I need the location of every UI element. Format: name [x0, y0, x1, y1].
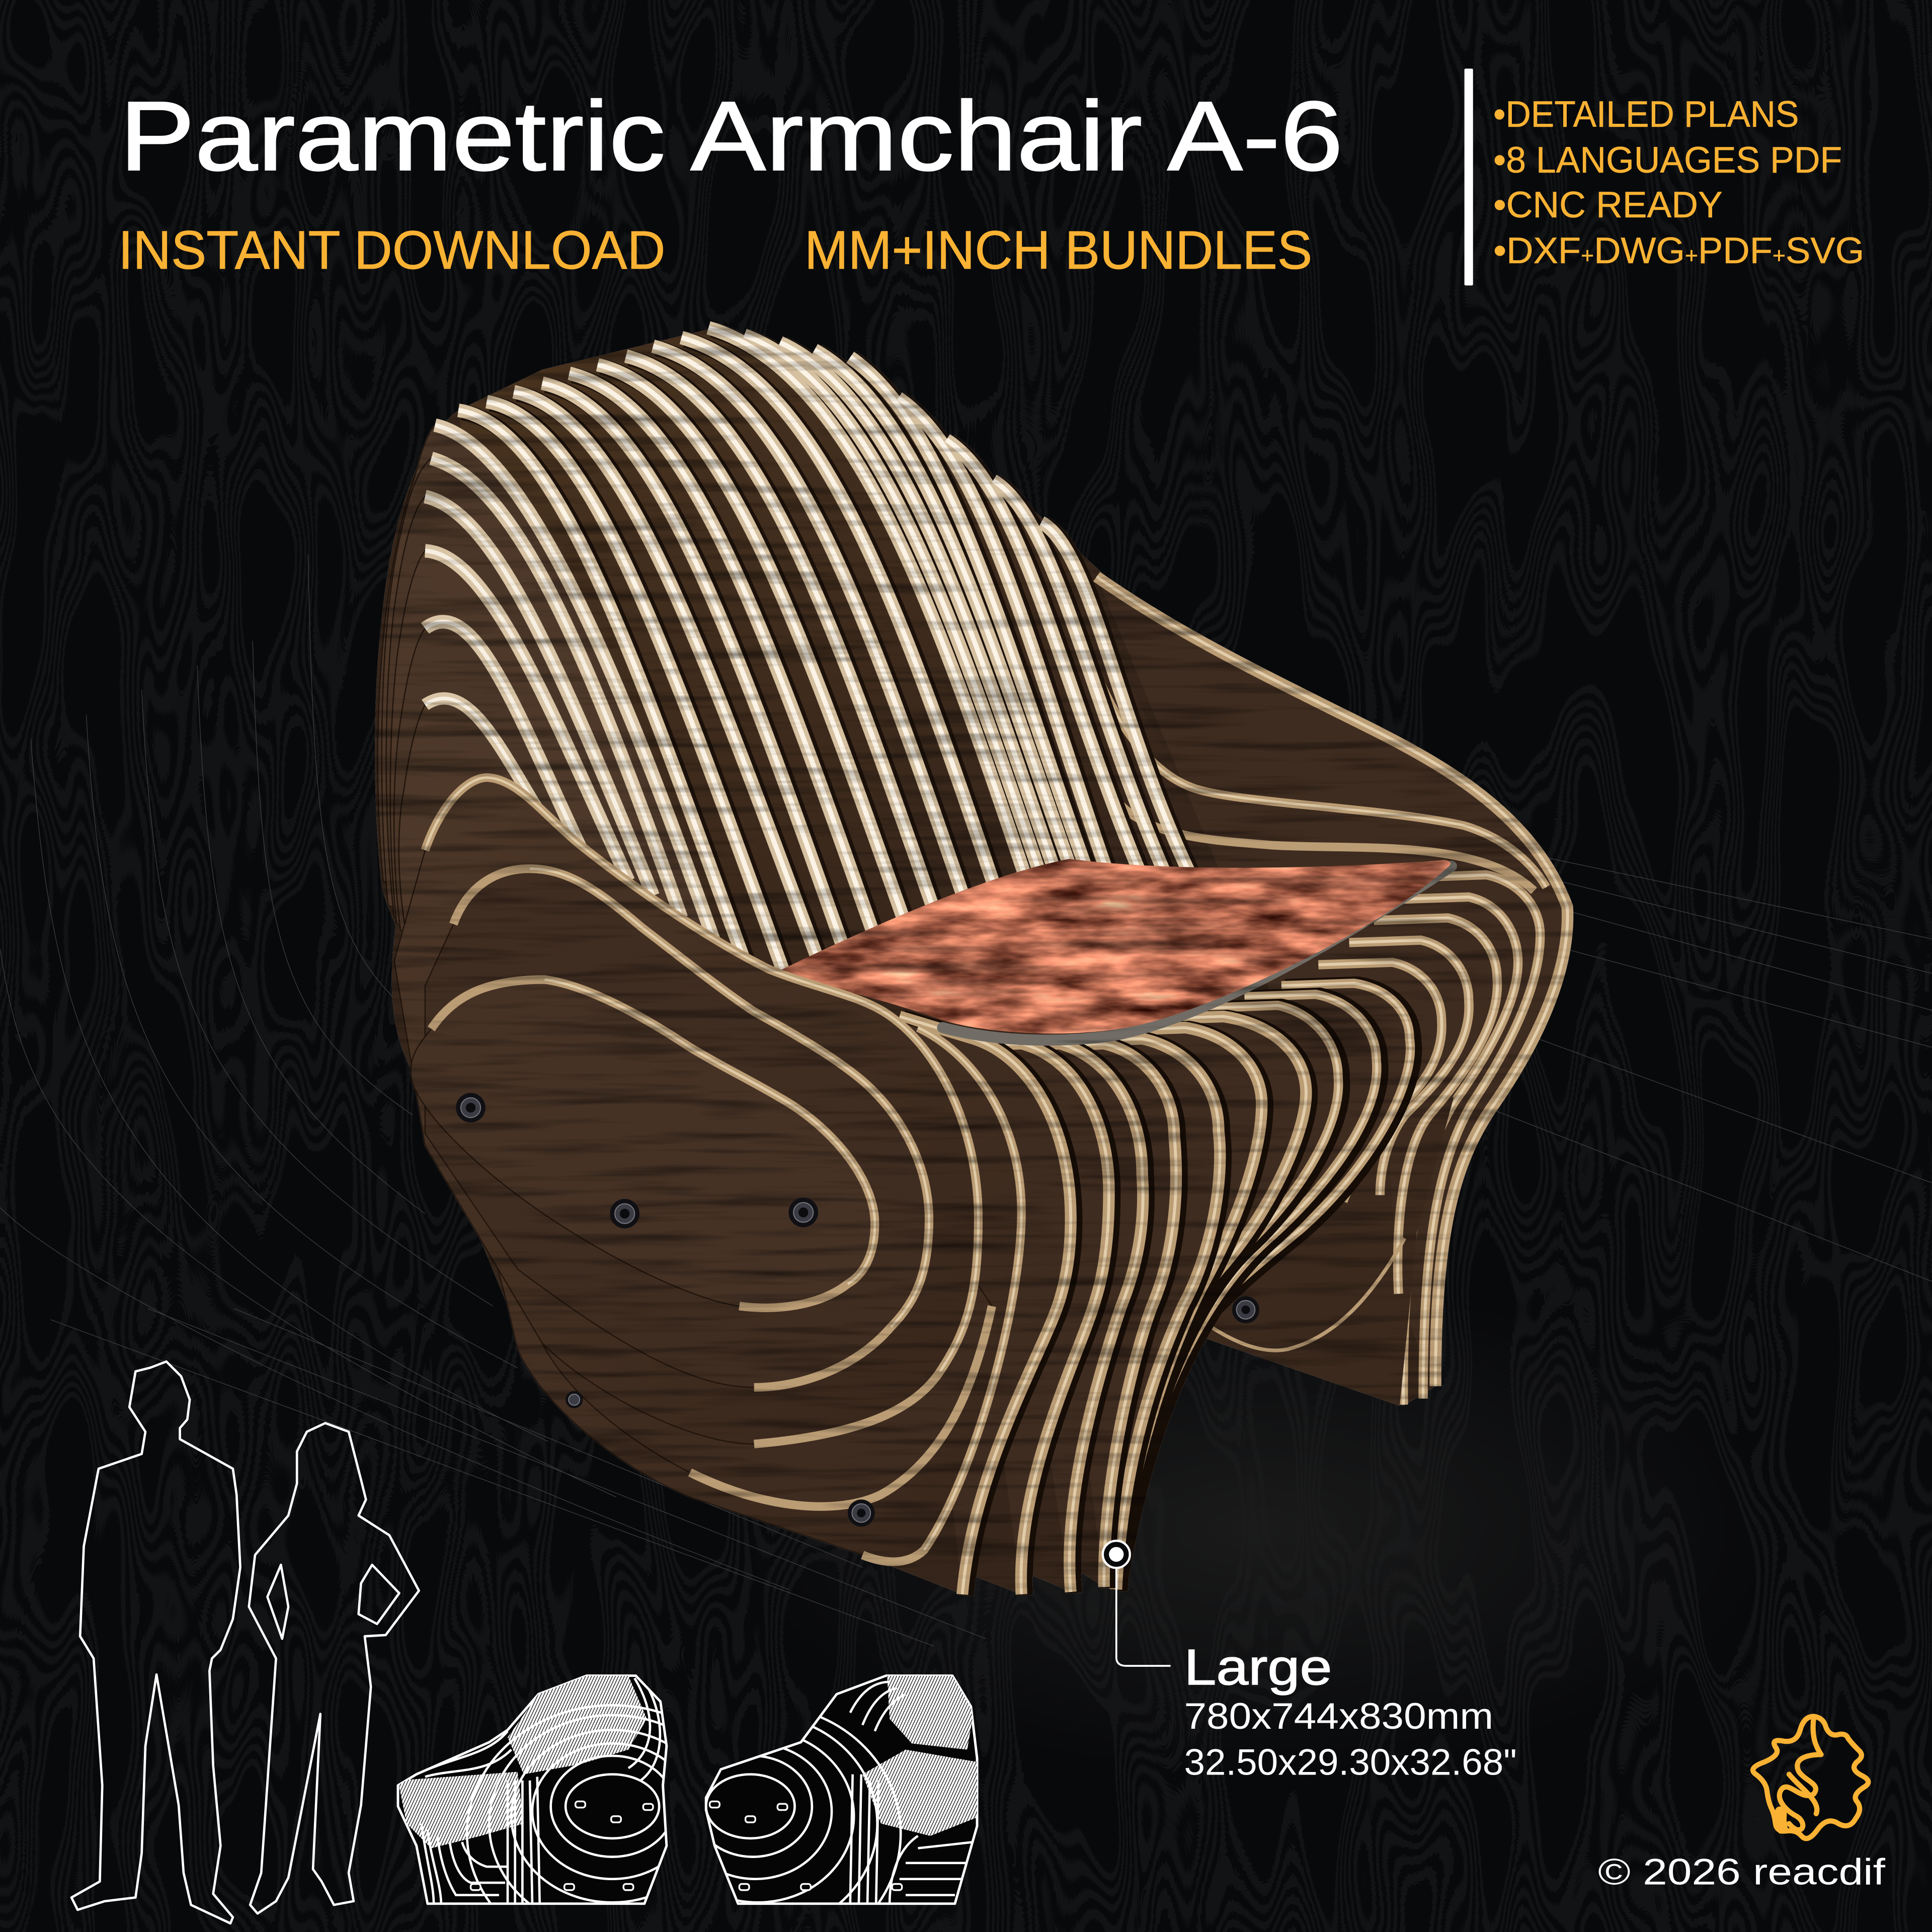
right arm outer plate	[1062, 577, 1568, 1386]
chair base silhouette	[375, 328, 1567, 1594]
rear leg panel	[1190, 1097, 1454, 1406]
dimensions: 32.50x29.30x32.68"	[1184, 1741, 1517, 1783]
chair line drawing: front left view	[396, 1674, 668, 1905]
stacked arm panels	[394, 777, 1021, 1562]
dimensions: 780x744x830mm	[1184, 1695, 1493, 1737]
dimensions	[1184, 1695, 1517, 1783]
callout marker and leader line	[1103, 1541, 1171, 1666]
subtitle: bundles: MM+INCH BUNDLES	[804, 219, 1312, 280]
feature list: •DETAILED PLANS	[1493, 93, 1799, 135]
perspective guide lines	[0, 554, 1932, 1646]
vertical divider	[1465, 68, 1473, 285]
title: Parametric Armchair A-6	[120, 81, 1343, 191]
bolts	[456, 1093, 1259, 1526]
back ribs	[458, 328, 1193, 988]
armchair	[375, 328, 1568, 1595]
right arm inner edge lines	[1084, 640, 1546, 887]
logo: reacdif mark	[1753, 1716, 1868, 1838]
back panel behind ribs	[458, 328, 1195, 986]
feature list: •CNC READY	[1493, 184, 1723, 225]
feature list	[1493, 93, 1864, 271]
chair line drawing: front right view	[704, 1674, 978, 1905]
floor glow	[739, 1281, 1775, 1775]
arm panel 2	[425, 869, 929, 1388]
size label: Large	[1184, 1639, 1332, 1696]
rear leg ribs	[1190, 875, 1540, 1406]
arm panel 5	[456, 924, 1021, 1562]
arm panel 3	[394, 777, 978, 1444]
seat front ribs	[900, 983, 1414, 1595]
woman silhouette	[249, 1423, 419, 1913]
subtitle: instant download: INSTANT DOWNLOAD	[118, 219, 665, 280]
man silhouette	[71, 1361, 240, 1923]
feature list: •DXF+DWG+PDF+SVG	[1493, 229, 1864, 271]
arm panel 1 with bolts	[411, 980, 875, 1308]
rear panel edge	[1201, 1238, 1405, 1350]
copyright: © 2026 reacdif	[1598, 1850, 1886, 1892]
left stacked back plates	[378, 425, 714, 961]
leather seat cushion	[774, 859, 1452, 1040]
feature list: •8 LANGUAGES PDF	[1493, 139, 1842, 181]
arm panel 4	[542, 1109, 992, 1506]
